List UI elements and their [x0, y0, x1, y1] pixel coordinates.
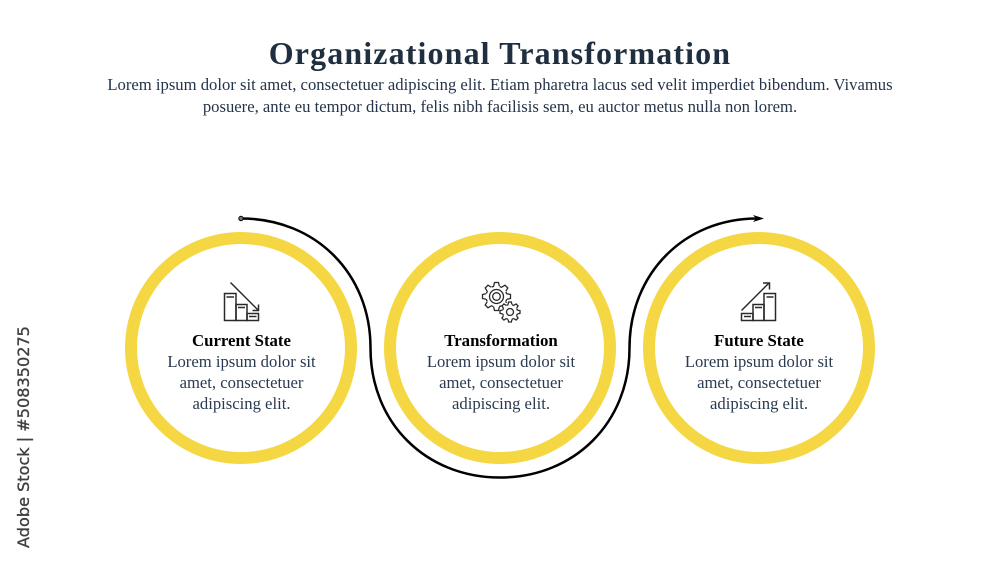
- stock credit: Adobe Stock | #508350275: [14, 326, 33, 547]
- text block: transformation: Lorem ipsum dolor sit: [427, 352, 575, 371]
- icon: gears: [482, 282, 520, 322]
- text block: current state: amet, consectetuer: [180, 373, 303, 392]
- text block: future state: [685, 331, 834, 413]
- text block: transformation: [427, 331, 576, 413]
- text block: future state: Lorem ipsum dolor sit: [685, 352, 833, 371]
- title: Organizational Transformation: [269, 35, 731, 71]
- flow arrow: [239, 215, 764, 478]
- subtitle text: posuere, ante eu tempor dictum, felis nibh facilisis sem, eu auctor metus nulla non lorem.: [203, 96, 797, 116]
- text block: current state: adipiscing elit.: [192, 394, 290, 413]
- text block: future state: adipiscing elit.: [710, 394, 808, 413]
- icon: declining bars: [224, 282, 258, 320]
- subtitle text: Lorem ipsum dolor sit amet, consectetuer adipiscing elit. Etiam pharetra lacus sed velit imperdiet bibendum. Vivamus: [107, 75, 893, 94]
- text block: future state: Future State: [714, 331, 804, 350]
- text block: current state: Current State: [192, 331, 291, 350]
- text block: current state: [167, 331, 316, 413]
- subtitle text: [107, 75, 893, 116]
- ring: future state: [649, 238, 869, 458]
- icon: rising bars: [742, 283, 776, 320]
- text block: transformation: amet, consectetuer: [439, 373, 563, 392]
- text block: transformation: adipiscing elit.: [452, 394, 550, 413]
- text block: current state: Lorem ipsum dolor sit: [167, 352, 316, 371]
- text block: future state: amet, consectetuer: [697, 373, 821, 392]
- text block: transformation: Transformation: [444, 331, 558, 350]
- ring: transformation: [390, 238, 610, 458]
- ring: current state: [131, 238, 351, 458]
